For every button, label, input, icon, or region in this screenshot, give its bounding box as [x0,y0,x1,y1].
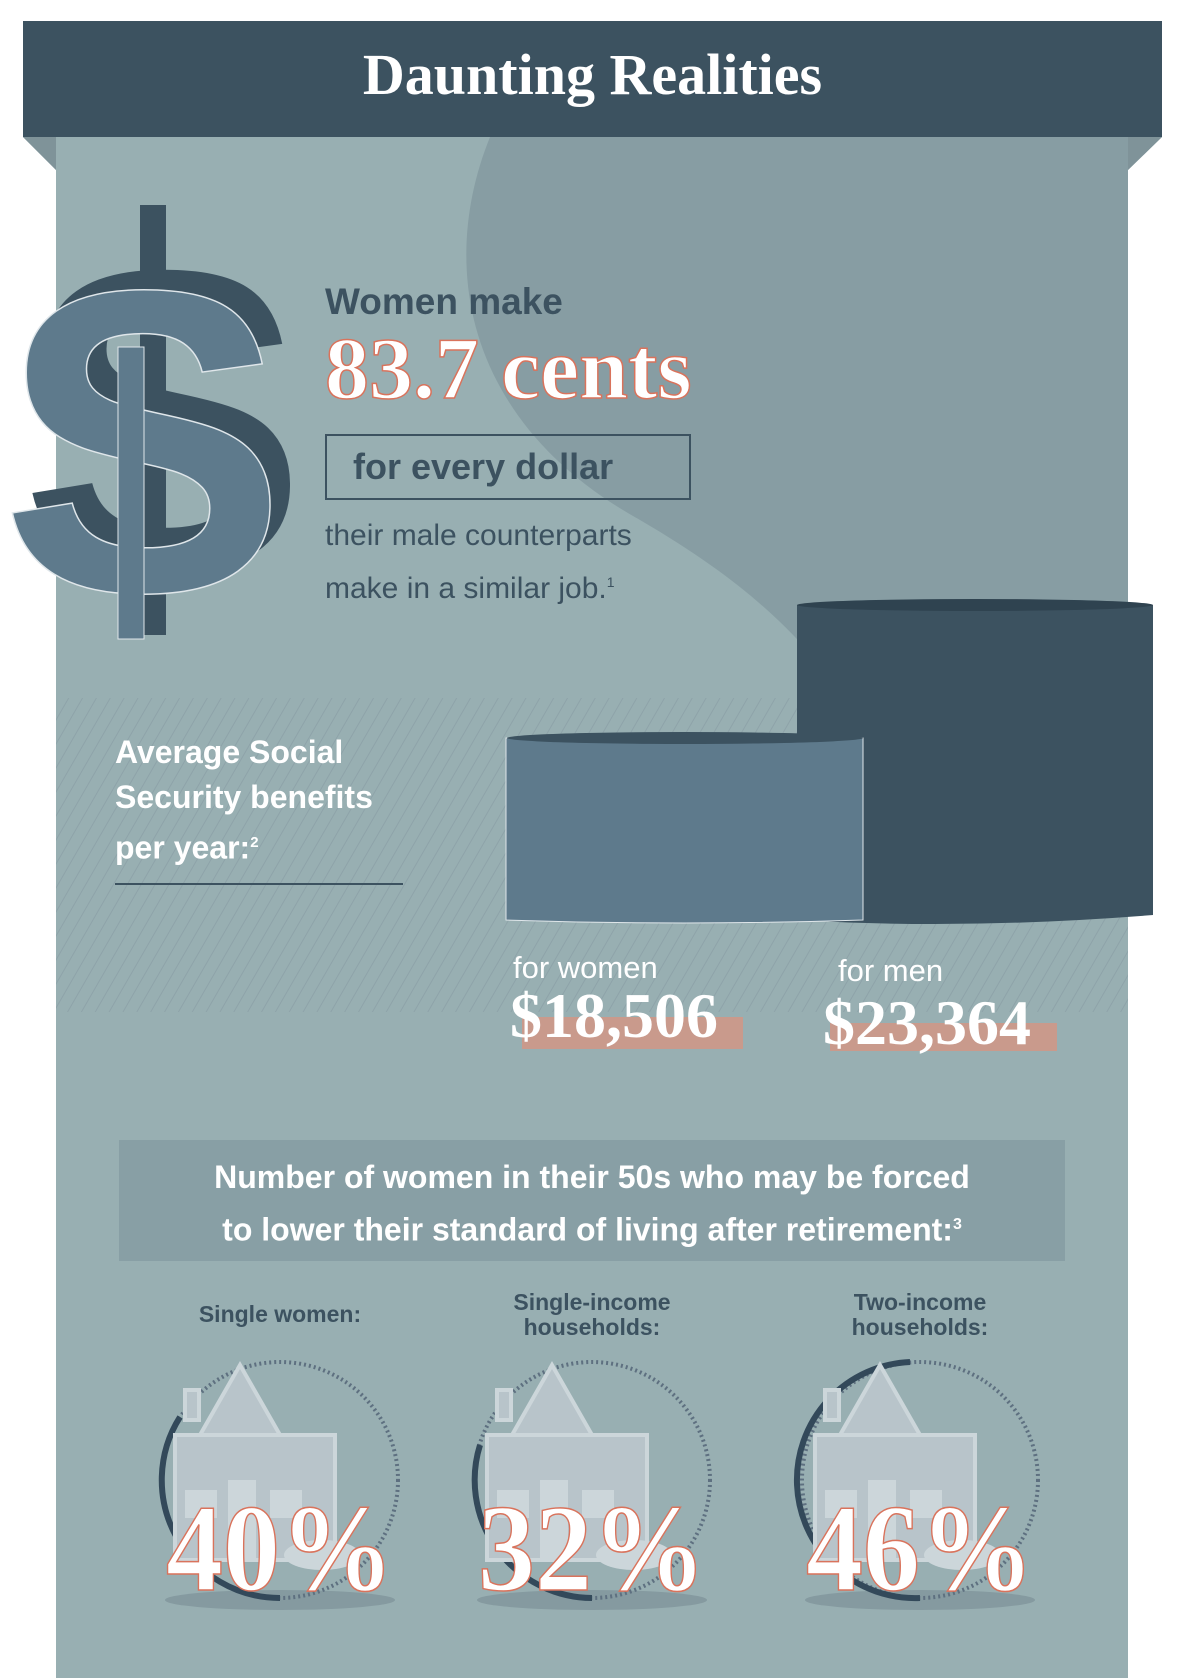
stat: two-income households: households: [852,1314,988,1340]
text: counterparts: make in a similar job.1 [325,572,615,605]
stat: men: for men [838,953,943,988]
stat: women: for women [513,950,658,985]
title: Daunting Realities [363,42,822,107]
panel: standard of living heading [119,1140,1065,1261]
stat: single women: Single women: [199,1301,361,1327]
dark curve background [466,137,1128,700]
text: average social security: Average Social Security benefits per year:2 [115,734,373,866]
text: counterparts: their male counterparts [325,519,632,552]
hatched band [56,698,1128,1012]
stat: two-income households: 46% [806,1480,1034,1617]
callout: for every dollar: for every dollar [353,446,613,487]
panel: standard of living heading: to lower their standard of living after retirement:3 [222,1212,962,1248]
stat: two-income households [794,1289,1040,1617]
text block: wage gap: Women make [325,281,563,322]
panel: standard of living heading: Number of women in their 50s who may be forced [214,1159,970,1195]
header bar [23,21,1162,137]
stat: single-income households: Single-income [513,1289,671,1315]
chart: benefits cylinders [506,599,1153,924]
stat: single-income households: households: [524,1314,660,1340]
stat: single women [158,1301,400,1617]
stat: single women: 40% [166,1480,394,1617]
stat: two-income households: Two-income [854,1289,986,1315]
stat: men: $23,364 [823,987,1031,1058]
callout: for every dollar [325,434,691,500]
stat: women: $18,506 [510,980,718,1051]
stat: single-income households: 32% [478,1480,706,1617]
stat: women [510,950,743,1051]
text: counterparts [325,519,632,605]
stat: single-income households [472,1289,712,1617]
stat: men [823,953,1057,1058]
text block: wage gap: 83.7 cents [325,321,692,418]
